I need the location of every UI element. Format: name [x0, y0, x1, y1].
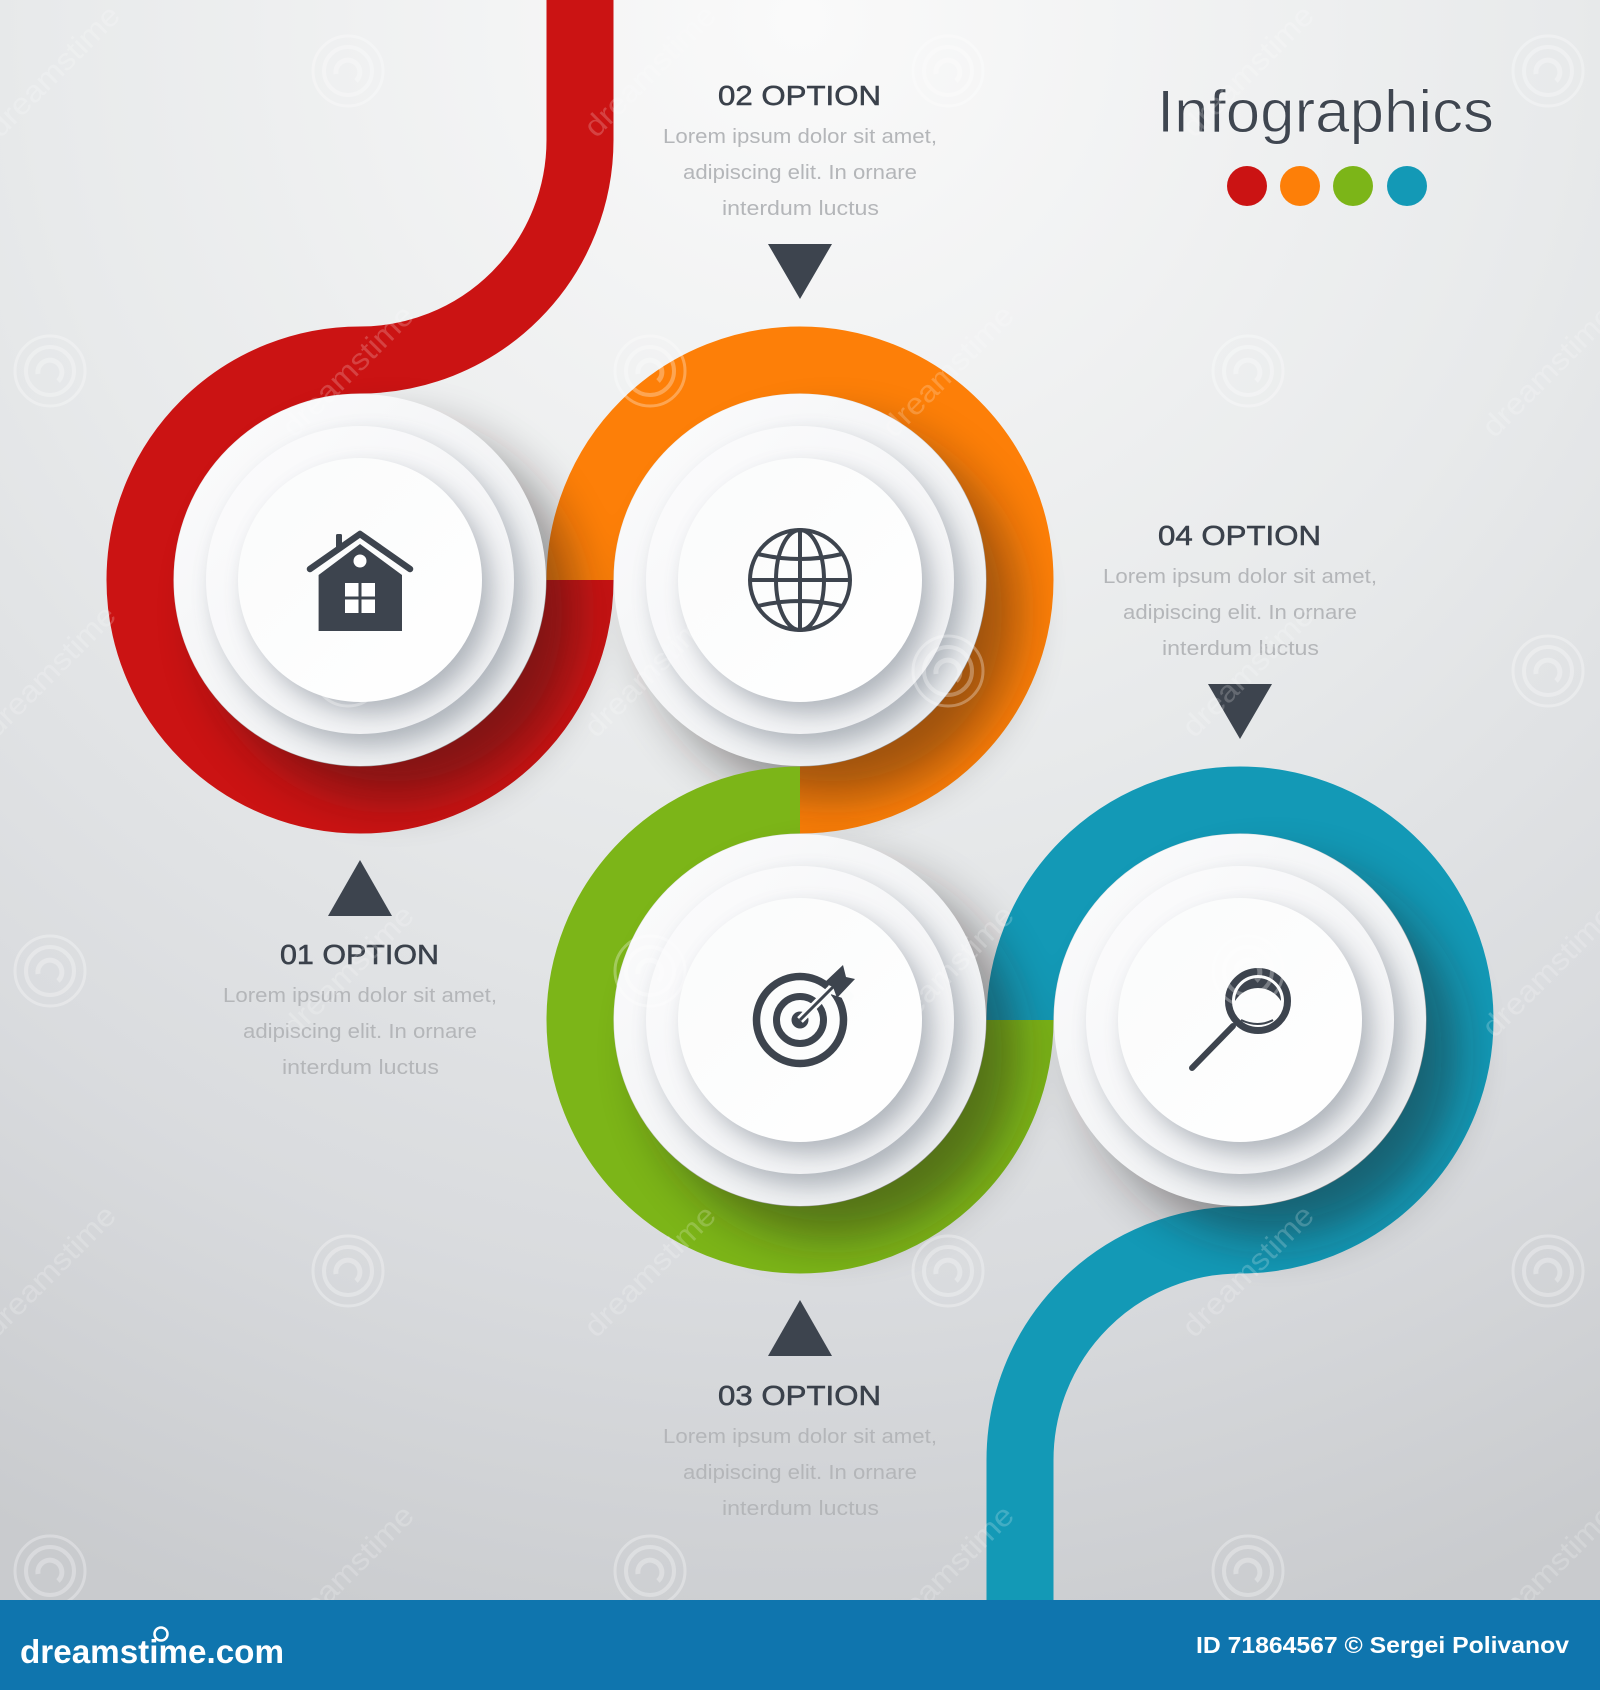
text: 03 option: interdum luctus	[722, 1498, 879, 1520]
arrow down 04	[1208, 684, 1272, 739]
text: 01 option	[223, 939, 497, 1079]
watermark text: dreamstime	[876, 899, 1021, 1044]
watermark text: dreamstime	[578, 599, 723, 744]
disc 3 with target icon	[614, 834, 986, 1206]
footer logo: dreamstime.com	[20, 1633, 284, 1670]
text: 04 option: interdum luctus	[1162, 638, 1319, 660]
watermark text: dreamstime	[276, 899, 421, 1044]
watermark text: dreamstime	[1176, 1199, 1321, 1344]
text: 02 option: 02 OPTION	[718, 80, 881, 111]
text: 04 option: adipiscing elit. In ornare	[1123, 602, 1357, 624]
orange ribbon	[580, 360, 1020, 800]
icon: house	[310, 534, 410, 631]
watermark text: dreamstime	[1176, 0, 1321, 144]
text: 03 option: 03 OPTION	[718, 1380, 881, 1411]
green ribbon	[580, 800, 1020, 1240]
text: 02 option: Lorem ipsum dolor sit amet,	[663, 126, 937, 148]
watermark text: dreamstime	[276, 299, 421, 444]
footer logo spiral	[154, 1628, 168, 1640]
text: 04 option: Lorem ipsum dolor sit amet,	[1103, 566, 1377, 588]
text: 01 option: 01 OPTION	[280, 939, 439, 970]
icon: magnifier	[1192, 972, 1288, 1068]
title: Infographics	[1157, 78, 1494, 145]
text: 01 option: interdum luctus	[282, 1057, 439, 1079]
text: 02 option: interdum luctus	[722, 198, 879, 220]
text: 03 option: adipiscing elit. In ornare	[683, 1462, 917, 1484]
watermark text: dreamstime	[876, 1499, 1021, 1644]
text: 02 option: adipiscing elit. In ornare	[683, 162, 917, 184]
text: 02 option	[663, 80, 937, 220]
teal ribbon	[1020, 800, 1460, 1610]
disc 1 with house icon	[174, 394, 546, 766]
disc 2 with globe icon	[614, 394, 986, 766]
disc shadows	[206, 426, 1018, 798]
text: 01 option: adipiscing elit. In ornare	[243, 1021, 477, 1043]
footer bar	[0, 1600, 1600, 1690]
disc 4 with magnifier icon	[1054, 834, 1426, 1206]
arrow down 02	[768, 244, 832, 299]
text: 03 option: Lorem ipsum dolor sit amet,	[663, 1426, 937, 1448]
arrow up 01	[328, 860, 392, 916]
watermark text: dreamstime	[1176, 599, 1321, 744]
text: 03 option	[663, 1380, 937, 1520]
watermark text: dreamstime	[578, 1199, 723, 1344]
footer credit: ID 71864567 © Sergei Polivanov	[1196, 1632, 1569, 1658]
watermark text: dreamstime	[876, 299, 1021, 444]
text: 04 option	[1103, 520, 1377, 660]
watermark text: dreamstime	[578, 0, 723, 144]
colour legend dots	[1227, 166, 1427, 206]
arrow up 03	[768, 1300, 832, 1356]
text: 01 option: Lorem ipsum dolor sit amet,	[223, 985, 497, 1007]
icon: target	[756, 965, 855, 1064]
red ribbon	[140, 0, 580, 800]
text: 04 option: 04 OPTION	[1158, 520, 1321, 551]
icon: globe	[750, 530, 850, 630]
watermark text: dreamstime	[276, 1499, 421, 1644]
lower disc shadows	[646, 866, 1458, 1238]
